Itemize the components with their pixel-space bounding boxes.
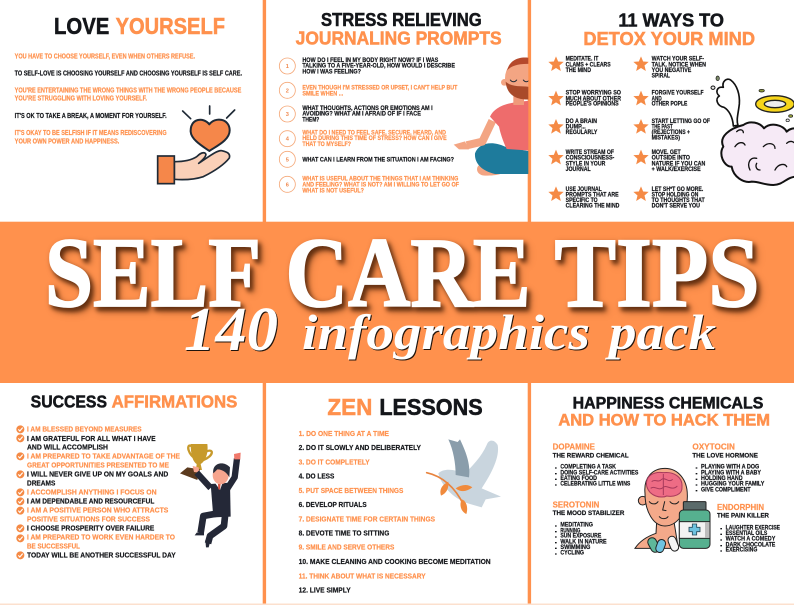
- section: serotonin: SUN EXPOSURE: [560, 534, 601, 540]
- panel: success affirmations: [16, 392, 241, 559]
- text block: detox tips right column: THE PAST: [652, 124, 673, 130]
- text block: detox tips left column: DO A BRAIN: [566, 119, 597, 125]
- text block: detox tips right column: WATCH YOUR SELF-: [652, 57, 704, 63]
- text block: prompts: THEM?: [302, 116, 319, 123]
- section: serotonin: CYCLING: [560, 551, 584, 557]
- text block: zen lessons list: 9. SMILE AND SERVE OTHERS: [299, 543, 394, 552]
- heading: happiness chemicals: HAPPINESS CHEMICALS: [573, 394, 763, 412]
- circle numbers: 3: [286, 112, 289, 118]
- text block: self love statements: TO SELF-LOVE IS CHOOSING YOURSELF AND CHOOSING YOURSELF IS SELF CARE.: [15, 70, 242, 77]
- text block: prompts: EVEN THOUGH I'M STRESSED OR UPSET, I CAN'T HELP BUT: [302, 84, 457, 91]
- text block: detox tips right column: LET SH*T GO MORE.: [652, 187, 704, 193]
- text block: detox tips right column: SPIRAL: [652, 74, 670, 80]
- section: endorphin: THE PAIN KILLER: [717, 513, 769, 520]
- section: dopamine: THE REWARD CHEMICAL: [553, 452, 629, 459]
- heading: happiness chemicals: AND HOW TO HACK THEM: [558, 412, 770, 430]
- banner subtitle: [184, 296, 716, 364]
- text block: detox tips right column: TO THOUGHTS THAT: [652, 198, 705, 204]
- section: dopamine: EATING FOOD: [560, 476, 598, 482]
- text block: detox tips right column: FORGIVE YOURSELF: [652, 91, 704, 97]
- section: serotonin: THE MOOD STABILIZER: [553, 510, 625, 517]
- section: oxytocin: THE LOVE HORMONE: [692, 452, 759, 459]
- text block: prompts: TALKING TO A FIVE-YEAR-OLD, HOW WOULD I DESCRIBE: [302, 63, 455, 70]
- section: oxytocin: HOLDING HAND: [701, 476, 743, 482]
- section: endorphin: EXERCISING: [726, 548, 758, 554]
- text block: detox tips left column: PROMPTS THAT ARE: [566, 192, 619, 198]
- text block: affirmations: I CHOOSE PROSPERITY OVER FAILURE: [27, 523, 154, 532]
- section: serotonin: [553, 500, 625, 557]
- text block: zen lessons list: 8. DEVOTE TIME TO SITTING: [299, 529, 389, 538]
- text block: detox tips left column: STOP WORRYING SO: [566, 91, 621, 97]
- banner subtitle: infographics: [302, 304, 590, 360]
- section: oxytocin: HUGGING YOUR FAMILY: [701, 482, 764, 488]
- heading: zen lessons: LESSONS: [379, 394, 483, 420]
- illustration: dove with branch: [427, 439, 501, 514]
- illustration: businessman with trophy: [180, 444, 241, 547]
- illustration: angel brain cloud: [711, 76, 794, 185]
- text block: detox tips right column: DON'T SERVE YOU: [652, 204, 700, 210]
- text block: detox tips left column: WRITE STREAM OF: [566, 150, 614, 156]
- text block: zen lessons list: 4. DO LESS: [299, 472, 334, 481]
- text block: zen lessons list: 5. PUT SPACE BETWEEN THINGS: [299, 486, 403, 495]
- section: serotonin: RUNNING: [560, 528, 581, 534]
- text block: prompts: WHAT DO I NEED TO FEEL SAFE, SECURE, HEARD, AND: [302, 129, 446, 136]
- section: endorphin: ESSENTIAL OILS: [726, 531, 767, 537]
- text block: detox tips right column: NATURE IF YOU CAN: [652, 161, 705, 167]
- text block: affirmations: I AM PREPARED TO WORK EVEN HARDER TO: [27, 532, 175, 541]
- section: oxytocin: PLAYING WITH A DOG: [701, 465, 760, 471]
- text block: affirmations: I AM A POSITIVE PERSON WHO ATTRACTS: [27, 505, 168, 514]
- icons: check marks: [16, 425, 24, 559]
- section: endorphin: ENDORPHIN: [717, 502, 764, 512]
- text block: zen lessons list: 11. THINK ABOUT WHAT IS NECESSARY: [299, 571, 426, 580]
- heading: stress relieving journaling prompts: JOURNALING PROMPTS: [296, 27, 502, 48]
- banner: self care tips: [0, 217, 794, 383]
- text block: prompts: HOW DO I FEEL IN MY BODY RIGHT NOW? IF I WAS: [302, 57, 438, 64]
- section: oxytocin: OXYTOCIN: [692, 442, 735, 452]
- text block: affirmations: POSITIVE SITUATIONS FOR SUCCESS: [27, 514, 150, 523]
- text block: prompts: SMILE WHEN ...: [302, 90, 344, 97]
- illustration: meditating man: [454, 58, 528, 176]
- text block: zen lessons list: 6. DEVELOP RITUALS: [299, 500, 367, 509]
- text block: detox tips right column: MOVE. GET: [652, 150, 681, 156]
- text block: prompts: WHAT CAN I LEARN FROM THE SITUATION I AM FACING?: [302, 156, 454, 163]
- text block: detox tips right column: [652, 57, 710, 210]
- text block: prompts: AVOIDING? WHAT AM I AFRAID OF IF I FACE: [302, 111, 421, 118]
- section: serotonin: SWIMMING: [560, 545, 591, 551]
- heading: success affirmations: AFFIRMATIONS: [112, 392, 238, 412]
- panel: zen lessons: [299, 394, 501, 594]
- heading: success affirmations: SUCCESS: [31, 392, 107, 412]
- section: serotonin: SEROTONIN: [553, 500, 599, 510]
- text block: prompts: HOW I WAS FEELING?: [302, 69, 361, 76]
- text block: detox tips left column: REGULARLY: [566, 130, 597, 136]
- banner title: SELF: [45, 217, 261, 328]
- numbered circles: [279, 58, 295, 192]
- text block: self love statements: YOU'RE STRUGGLING WITH LOVING YOURSELF.: [15, 96, 147, 103]
- text block: zen lessons list: 10. MAKE CLEANING AND COOKING BECOME MEDITATION: [299, 557, 491, 566]
- text block: prompts: HELD DURING THIS TIME OF STRESS? HOW CAN I GIVE: [302, 135, 447, 142]
- circle numbers: [286, 64, 290, 188]
- section: endorphin: DARK CHOCOLATE: [726, 542, 775, 548]
- circle numbers: 1: [286, 64, 289, 70]
- heading: stress relieving journaling prompts: [296, 9, 502, 48]
- heading: success affirmations: [31, 392, 238, 412]
- section: serotonin: MEDITATING: [560, 523, 593, 529]
- text block: detox tips right column: (REJECTIONS +: [652, 130, 690, 136]
- section: dopamine: DOING SELF-CARE ACTIVITIES: [560, 470, 638, 476]
- heading: 11 ways to detox your mind: DETOX YOUR MIND: [583, 28, 755, 49]
- section: endorphin: WATCH A COMEDY: [726, 537, 775, 543]
- section: oxytocin: GIVE COMPLIMENT: [701, 487, 751, 493]
- text block: detox tips right column: OUTSIDE INTO: [652, 156, 690, 162]
- icons: stars: [548, 56, 649, 201]
- text block: detox tips left column: JOURNAL: [566, 167, 591, 173]
- text block: detox tips right column: OTHER POPLE: [652, 102, 687, 108]
- text block: affirmations: DREAMS: [27, 478, 55, 487]
- text block: detox tips right column: START LETTING GO OF: [652, 119, 710, 125]
- heading: zen lessons: [327, 394, 483, 420]
- section: oxytocin: PLAYING WITH A BABY: [701, 470, 761, 476]
- text block: affirmations: BE SUCCESSFUL: [27, 541, 80, 550]
- text block: detox tips right column: STOP HOLDING ON: [652, 192, 698, 198]
- text block: self love statements: IT'S OK TO TAKE A BREAK, A MOMENT FOR YOURSELF.: [15, 113, 167, 120]
- section: endorphin: LAUGHTER EXERCISE: [726, 525, 780, 531]
- text block: affirmations: I AM BLESSED BEYOND MEASURES: [27, 425, 142, 434]
- section: dopamine: [553, 442, 638, 488]
- text block: prompts: WHAT IS USEFUL ABOUT THE THINGS THAT I AM THINKING: [302, 176, 458, 183]
- text block: detox tips left column: PEOPLE'S OPINIONS: [566, 102, 619, 108]
- banner subtitle: 140: [184, 296, 278, 364]
- text block: self love statements: YOU HAVE TO CHOOSE YOURSELF, EVEN WHEN OTHERS REFUSE.: [15, 53, 195, 60]
- heading: happiness chemicals: [558, 394, 770, 430]
- heading: love yourself: [54, 13, 225, 39]
- panel: love yourself: [15, 13, 242, 184]
- heading: 11 ways to detox your mind: 11 WAYS TO: [618, 10, 724, 31]
- text block: prompts: WHAT THOUGHTS, ACTIONS OR EMOTIONS AM I: [302, 105, 433, 112]
- text block: affirmations: GREAT OPPORTUNITIES PRESENTED TO ME: [27, 461, 169, 470]
- heading: love yourself: YOURSELF: [116, 13, 225, 39]
- text block: detox tips left column: CLAMS + CLEARS: [566, 62, 611, 68]
- text block: self love statements: IT'S OKAY TO BE SELFISH IF IT MEANS REDISCOVERING: [15, 130, 167, 137]
- text block: detox tips left column: USE JOURNAL: [566, 187, 602, 193]
- text block: detox tips right column: + WALK/EXERCISE: [652, 167, 701, 173]
- text block: affirmations: TODAY WILL BE ANOTHER SUCCESSFUL DAY: [27, 550, 176, 559]
- text block: detox tips right column: AND: [652, 96, 662, 102]
- text block: prompts: AND FEELING? WHAT IS NOT? AM I WILLING TO LET GO OF: [302, 182, 459, 189]
- section: oxytocin: [692, 442, 764, 493]
- section: serotonin: WALK IN NATURE: [560, 539, 607, 545]
- circle numbers: 6: [286, 182, 289, 188]
- banner title: TIPS: [554, 217, 760, 328]
- text block: detox tips right column: YOU NEGATIVE: [652, 68, 691, 74]
- text block: detox tips left column: SPECIFIC TO: [566, 198, 598, 204]
- text block: zen lessons list: 3. DO IT COMPLETELY: [299, 457, 370, 466]
- text block: detox tips left column: CONSCIOUSNESS-: [566, 156, 614, 162]
- text block: detox tips left column: MEDITATE. IT: [566, 57, 599, 63]
- text block: prompts: [302, 57, 459, 194]
- circle numbers: 5: [286, 157, 289, 163]
- text block: detox tips left column: DUMP...: [566, 124, 586, 130]
- text block: detox tips left column: [566, 57, 622, 210]
- circle numbers: 2: [286, 88, 289, 94]
- illustration: head with brain and medicine bottle: [635, 468, 710, 554]
- section: endorphin: [717, 502, 780, 554]
- banner title: CARE: [286, 217, 530, 328]
- banner subtitle: pack: [605, 304, 716, 360]
- heading: stress relieving journaling prompts: STRESS RELIEVING: [321, 9, 482, 30]
- text block: detox tips left column: MUCH ABOUT OTHER: [566, 96, 622, 102]
- icon: hand holding heart: [158, 106, 235, 184]
- text block: affirmations: I ACCOMPLISH ANYTHING I FOCUS ON: [27, 487, 157, 496]
- text block: zen lessons list: 1. DO ONE THING AT A TIME: [299, 429, 389, 438]
- panel: happiness chemicals: [553, 394, 780, 557]
- text block: prompts: THAT TO MYSELF?: [302, 141, 351, 148]
- panel: stress relieving journaling prompts: [279, 9, 540, 194]
- text block: affirmations: I WILL NEVER GIVE UP ON MY GOALS AND: [27, 470, 169, 479]
- banner title: [45, 217, 760, 328]
- section: dopamine: DOPAMINE: [553, 442, 595, 452]
- text block: zen lessons list: [299, 429, 491, 594]
- text block: detox tips left column: CLEARING THE MIND: [566, 204, 620, 210]
- section: dopamine: COMPLETING A TASK: [560, 465, 617, 471]
- text block: zen lessons list: 12. LIVE SIMPLY: [299, 585, 351, 594]
- text block: affirmations: I AM GRATEFUL FOR ALL WHAT I HAVE: [27, 434, 156, 443]
- heading: love yourself: LOVE: [54, 13, 109, 39]
- text block: self love statements: YOU'RE ENTERTAINING THE WRONG THINGS WITH THE WRONG PEOPLE BECAUSE: [15, 87, 242, 94]
- section: dopamine: CELEBRATING LITTLE WINS: [560, 482, 630, 488]
- text block: affirmations: I AM DEPENDABLE AND RESOURCEFUL: [27, 496, 155, 505]
- text block: self love statements: [15, 53, 242, 146]
- panel: 11 ways to detox your mind: [548, 10, 794, 210]
- text block: detox tips right column: TALK, NOTICE WHEN: [652, 62, 706, 68]
- circle numbers: 4: [286, 137, 290, 143]
- text block: zen lessons list: 2. DO IT SLOWLY AND DELIBERATELY: [299, 443, 421, 452]
- text block: detox tips left column: STYLE IN YOUR: [566, 161, 606, 167]
- heading: 11 ways to detox your mind: [583, 10, 755, 49]
- heading: zen lessons: ZEN: [327, 394, 372, 420]
- text block: affirmations: [27, 425, 180, 559]
- text block: affirmations: AND WILL ACCOMPLISH: [27, 443, 108, 452]
- text block: prompts: WHAT IS NOT USEFUL?: [302, 187, 364, 194]
- text block: self love statements: YOUR OWN POWER AND HAPPINESS.: [15, 139, 119, 146]
- text block: detox tips left column: THE MIND: [566, 68, 592, 74]
- text block: detox tips right column: MISTAKES): [652, 136, 680, 142]
- text block: affirmations: I AM PREPARED TO TAKE ADVANTAGE OF THE: [27, 452, 180, 461]
- text block: zen lessons list: 7. DESIGNATE TIME FOR CERTAIN THINGS: [299, 514, 435, 523]
